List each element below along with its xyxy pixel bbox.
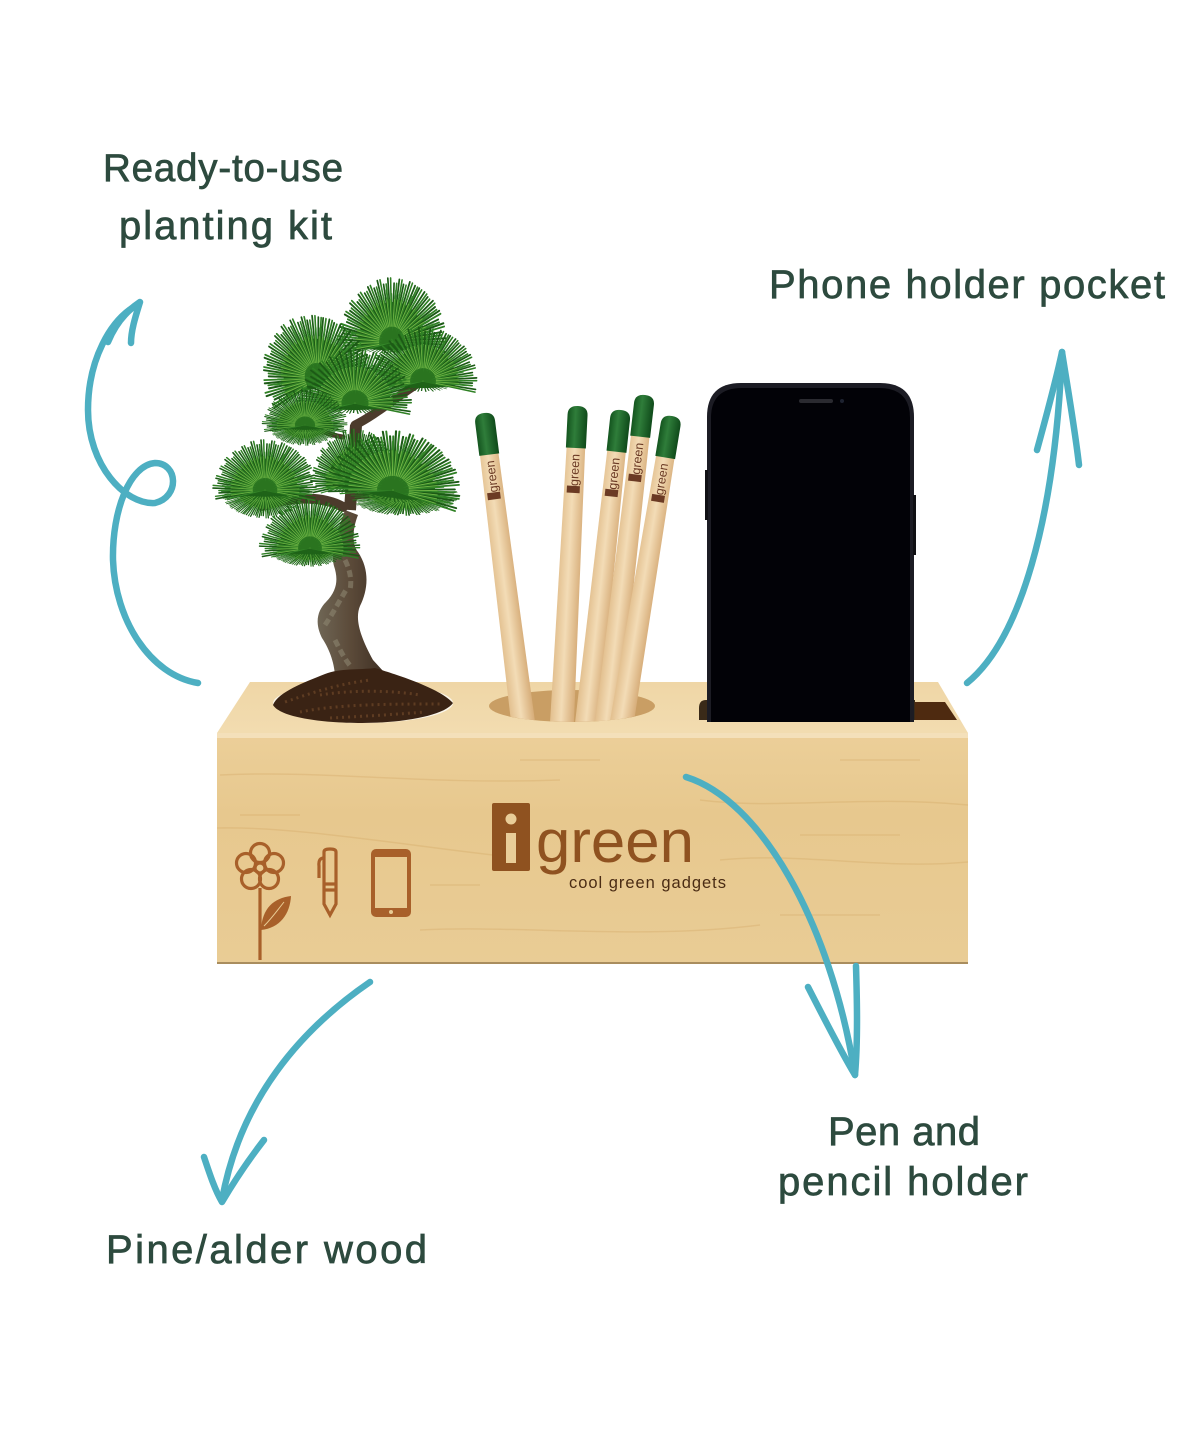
igreen logo: green xyxy=(536,808,694,875)
engraved icon: flower xyxy=(236,844,291,960)
arrow: to planting kit xyxy=(88,302,198,683)
infographic canvas xyxy=(84,152,1166,1264)
heading label: pen and pencil holder: Pen and xyxy=(828,1110,980,1154)
heading label: planting kit: planting kit xyxy=(119,204,332,248)
pencil 5 xyxy=(610,416,681,720)
pencil 4: green xyxy=(629,442,646,475)
pencil 3 xyxy=(574,409,633,734)
arrow: to phone holder xyxy=(967,352,1079,683)
heading label: pen and pencil holder xyxy=(778,1110,1028,1204)
engraved icon: phone xyxy=(373,851,409,916)
heading label: phone holder: Phone holder pocket xyxy=(769,263,1165,307)
wooden organiser block xyxy=(217,682,968,964)
heading label: planting kit: Ready-to-use xyxy=(103,147,343,190)
pencil 5: green xyxy=(652,462,671,496)
right slot end xyxy=(905,702,957,720)
pencil 2: green xyxy=(567,454,583,486)
bonsai tree xyxy=(213,275,479,723)
pencil 2 xyxy=(550,405,590,731)
heading label: pen and pencil holder: pencil holder xyxy=(778,1160,1028,1204)
heading label: planting kit xyxy=(103,147,343,248)
seed pencils xyxy=(472,394,684,734)
pencil hole xyxy=(489,690,655,722)
arrow: to pen and pencil holder xyxy=(686,777,857,1075)
pencil 4 xyxy=(596,394,654,721)
planter rim xyxy=(273,683,453,723)
smartphone xyxy=(705,383,916,722)
engraved icon: pen xyxy=(319,849,336,915)
heading label: wood: Pine/alder wood xyxy=(106,1228,427,1272)
phone slot xyxy=(699,700,915,720)
pencil 1 xyxy=(472,411,536,732)
soil mound xyxy=(273,668,453,723)
igreen logo: cool green gadgets xyxy=(569,874,726,892)
igreen logo xyxy=(492,803,726,892)
pencil 3: green xyxy=(605,457,623,490)
pencil 1: green xyxy=(483,460,501,493)
arrow: to wood label xyxy=(204,982,370,1202)
